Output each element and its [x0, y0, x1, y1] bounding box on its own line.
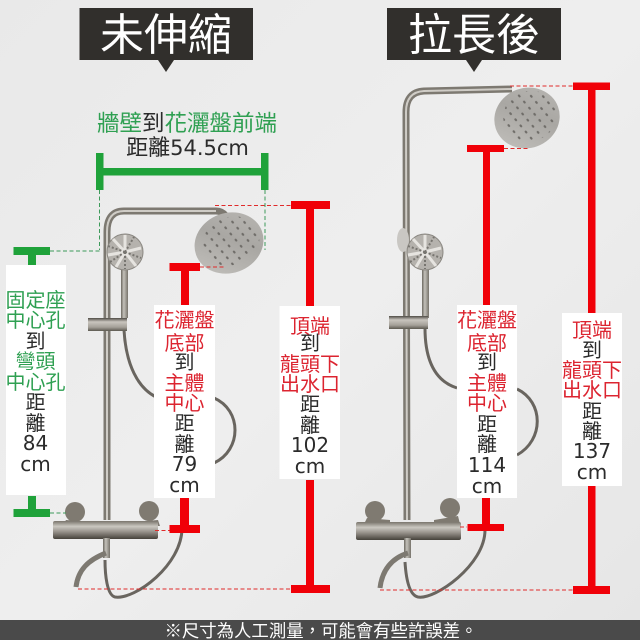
panel: top to spout 137 cm: [562, 82, 622, 594]
panel: mount to elbow 84 cm: 離: [26, 407, 46, 436]
panel: top to spout 102 cm: [280, 201, 340, 593]
panel: top to spout 102 cm: 龍頭下: [280, 348, 340, 377]
green guide lines: [50, 190, 265, 513]
riser pipe and arm: [107, 211, 226, 520]
title: unextended: [80, 8, 253, 72]
panel: mount to elbow 84 cm: cm: [20, 452, 51, 476]
panel: head bottom to body centre 79 cm: 到: [174, 346, 194, 375]
panel: head bottom to body centre 114 cm: 到: [477, 346, 497, 375]
lower pipe: [103, 538, 110, 558]
panel: top to spout 102 cm: 102: [291, 433, 329, 457]
panel: mount to elbow 84 cm: 84: [23, 431, 48, 455]
panel: top to spout 137 cm: 出水口: [562, 374, 622, 403]
title: unextended: 未伸縮: [100, 11, 232, 60]
red bottom cap: [291, 480, 330, 593]
panel: head bottom to body centre 79 cm: 中心: [164, 387, 204, 416]
footer note: [0, 618, 640, 640]
panel: head bottom to body centre 79 cm: 主體: [164, 367, 204, 396]
red bottom cap: [170, 498, 200, 533]
overhead shower head: [186, 203, 272, 283]
panel: mount to elbow 84 cm: 固定座: [6, 284, 66, 313]
panel: head bottom to body centre 79 cm: 離: [174, 428, 194, 457]
shower set: unextended: [53, 203, 272, 597]
panel: top to spout 137 cm: 離: [582, 415, 602, 444]
panel: head bottom to body centre 79 cm: [154, 263, 215, 533]
panel: top to spout 137 cm: 距: [582, 395, 602, 424]
panel: head bottom to body centre 114 cm: 距: [477, 408, 497, 437]
thermostatic valve body: [356, 522, 461, 540]
panel: head bottom to body centre 79 cm: 花灑盤: [154, 304, 214, 333]
red top cap: [170, 263, 200, 305]
red guide lines: [78, 86, 573, 590]
hand shower: [107, 234, 143, 318]
panel: top to spout 102 cm: cm: [295, 454, 325, 478]
panel: head bottom to body centre 79 cm: 距: [174, 407, 194, 436]
panel: top to spout 137 cm: 到: [582, 334, 602, 363]
valve knobs: [364, 498, 460, 524]
red top cap: [291, 201, 330, 306]
panel: head bottom to body centre 114 cm: 離: [477, 428, 497, 457]
panel: top to spout 102 cm: 到: [300, 327, 320, 356]
riser pipe and arm: [406, 89, 512, 520]
panel: head bottom to body centre 79 cm: cm: [169, 473, 200, 497]
wall to head front distance label: [97, 106, 277, 162]
green top cap: [14, 247, 50, 265]
panel: head bottom to body centre 114 cm: 中心: [467, 387, 507, 416]
title: extended: 拉長後: [408, 11, 540, 60]
panel: mount to elbow 84 cm: 中心孔: [6, 304, 66, 333]
spout: [380, 553, 408, 588]
green bottom cap: [14, 496, 50, 517]
panel: top to spout 102 cm: 頂端: [290, 310, 330, 339]
red bottom cap: [573, 486, 610, 594]
panel: mount to elbow 84 cm: 到: [26, 325, 46, 354]
panel: head bottom to body centre 114 cm: 主體: [467, 367, 507, 396]
wall mount bulge: [397, 228, 409, 252]
spout: [76, 553, 106, 587]
overhead shower head: [486, 79, 568, 157]
shower set: extended: [356, 79, 568, 597]
panel: mount to elbow 84 cm: 距: [26, 386, 46, 415]
panel: top to spout 102 cm: 離: [300, 409, 320, 438]
panel: top to spout 102 cm: 出水口: [280, 368, 340, 397]
wall to head front distance label: 距離54.5cm: [126, 130, 249, 162]
slider bracket: [389, 316, 428, 329]
valve knobs: [62, 501, 160, 526]
panel: head bottom to body centre 114 cm: cm: [472, 474, 502, 498]
panel: mount to elbow 84 cm: [6, 247, 66, 517]
panel: top to spout 137 cm: 龍頭下: [562, 354, 622, 383]
hose: [105, 330, 235, 597]
panel: head bottom to body centre 114 cm: 114: [468, 453, 506, 477]
panel: head bottom to body centre 114 cm: 花灑盤: [457, 304, 517, 333]
panel: head bottom to body centre 114 cm: 底部: [467, 327, 507, 356]
wall to head front distance label: 牆壁到花灑盤前端: [97, 106, 277, 138]
red bottom cap: [468, 498, 504, 531]
thermostatic valve body: [53, 521, 158, 539]
green width bracket: [96, 153, 268, 190]
panel: top to spout 137 cm: 137: [573, 439, 611, 463]
panel: head bottom to body centre 114 cm: [457, 145, 517, 531]
panel: top to spout 137 cm: 頂端: [572, 314, 612, 343]
panel: top to spout 102 cm: 距: [300, 388, 320, 417]
panel: head bottom to body centre 79 cm: 79: [172, 452, 197, 476]
lower pipe: [404, 538, 411, 558]
panel: top to spout 137 cm: cm: [577, 460, 607, 484]
red top cap: [573, 82, 610, 313]
panel: mount to elbow 84 cm: 中心孔: [6, 366, 66, 395]
title: extended: [387, 8, 561, 72]
panel: head bottom to body centre 79 cm: 底部: [164, 327, 204, 356]
panel: mount to elbow 84 cm: 彎頭: [16, 345, 56, 374]
red top cap: [467, 145, 504, 305]
hose: [405, 328, 537, 597]
slider bracket: [88, 318, 127, 331]
hand shower: [407, 234, 443, 318]
